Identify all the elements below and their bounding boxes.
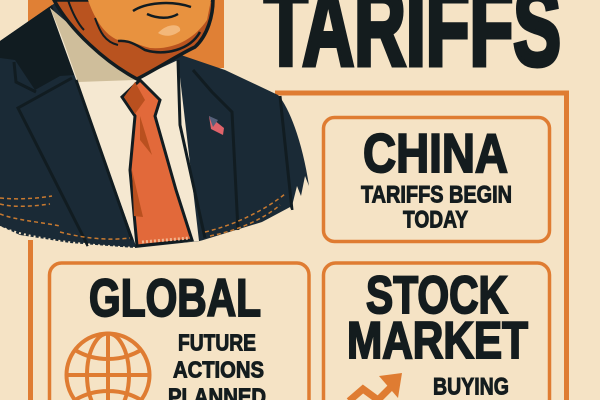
Global heading: GLOBAL — [89, 269, 261, 328]
card: Stock Market — [324, 263, 550, 400]
China heading: CHINA — [363, 122, 508, 184]
Global text line 1: FUTURE — [178, 330, 256, 356]
face — [54, 0, 213, 79]
orange backdrop — [28, 0, 224, 68]
illustration: portrait — [0, 0, 309, 248]
suit jacket — [0, 0, 309, 248]
panel frame — [30, 93, 566, 400]
China text line 2: TODAY — [403, 206, 468, 234]
Global text line 2: ACTIONS — [173, 356, 264, 382]
Stock heading: STOCK — [366, 266, 508, 325]
China text line 1: TARIFFS BEGIN — [361, 182, 512, 208]
lapel pin: flag — [209, 116, 224, 135]
Stock text: BUYING — [433, 374, 509, 400]
tie — [122, 80, 192, 246]
worn edge speckle — [0, 194, 292, 248]
lapel lines — [14, 60, 292, 246]
shirt collar shadow — [50, 8, 135, 82]
Market heading: MARKET — [347, 312, 528, 370]
icon: globe — [66, 333, 150, 400]
shirt — [50, 8, 199, 246]
dark shoulder shadow — [0, 5, 75, 90]
icon: rising arrow — [349, 373, 402, 400]
card: China — [324, 118, 550, 242]
card: Global — [50, 263, 309, 400]
